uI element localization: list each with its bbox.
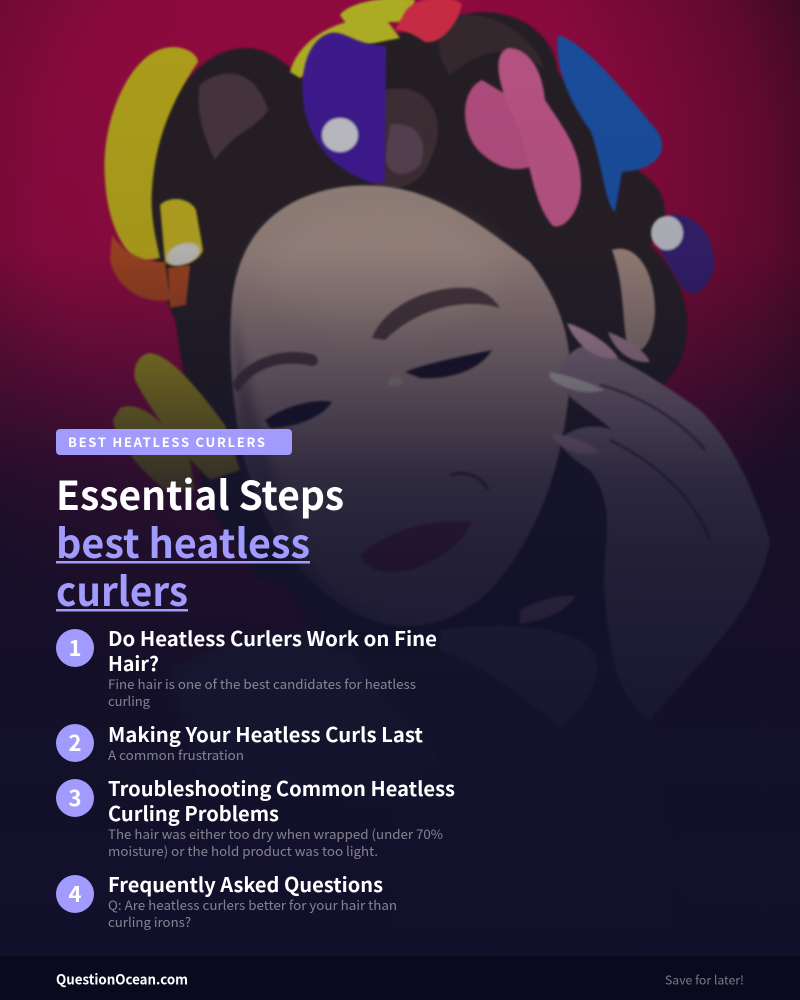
title: Essential Steps xyxy=(56,464,344,522)
step 4 xyxy=(56,869,397,931)
badge xyxy=(56,429,292,455)
step 3 xyxy=(56,773,455,860)
step 4: Frequently Asked Questions xyxy=(108,869,383,898)
hand xyxy=(440,323,770,730)
step 2: Making Your Heatless Curls Last xyxy=(108,719,424,748)
step 3: moisture) or the hold product was too light. xyxy=(108,841,378,860)
curler: yellow left xyxy=(104,47,198,262)
hair mass xyxy=(149,12,687,600)
eyes xyxy=(265,350,492,428)
badge: BEST HEATLESS CURLERS xyxy=(68,432,265,451)
title: best heatless xyxy=(56,512,310,570)
step 1: Hair? xyxy=(108,648,159,677)
step 3: Troubleshooting Common Heatless xyxy=(108,773,455,802)
step 1 xyxy=(56,623,437,710)
curler: orange xyxy=(110,235,190,308)
curler: pink xyxy=(465,48,581,227)
step 1: Do Heatless Curlers Work on Fine xyxy=(108,623,437,652)
step 1: curling xyxy=(108,691,151,710)
step 4: Q: Are heatless curlers better for your hair than xyxy=(108,895,397,914)
step 2 xyxy=(56,719,424,764)
step 1: 1 xyxy=(69,631,81,663)
face shading xyxy=(232,300,420,623)
title: curlers xyxy=(56,560,188,618)
step 2: A common frustration xyxy=(108,745,244,764)
clothing and neck xyxy=(170,540,700,1000)
curler: purple xyxy=(302,33,386,183)
step 3: The hair was either too dry when wrapped (under 70% xyxy=(108,824,443,843)
curler: red xyxy=(395,0,462,42)
step 2: 2 xyxy=(69,726,81,758)
step 3: 3 xyxy=(69,781,81,813)
face xyxy=(230,185,570,626)
curler: yellow cap xyxy=(160,199,203,269)
title xyxy=(56,464,344,618)
footer: QuestionOcean.com xyxy=(56,970,188,990)
curler: yellow top xyxy=(290,0,415,78)
step 1: Fine hair is one of the best candidates for heatless xyxy=(108,674,416,693)
step 4: curling irons? xyxy=(108,912,191,931)
step 4: 4 xyxy=(69,877,82,909)
curler: blue xyxy=(557,35,662,212)
ear xyxy=(612,249,655,353)
curler: yellow lower left xyxy=(113,353,240,490)
nose and lips xyxy=(360,473,488,572)
eyebrows xyxy=(232,288,500,392)
footer: Save for later! xyxy=(665,972,744,988)
footer xyxy=(0,956,800,1000)
curler: purple right xyxy=(651,214,714,293)
step 3: Curling Problems xyxy=(108,798,279,827)
